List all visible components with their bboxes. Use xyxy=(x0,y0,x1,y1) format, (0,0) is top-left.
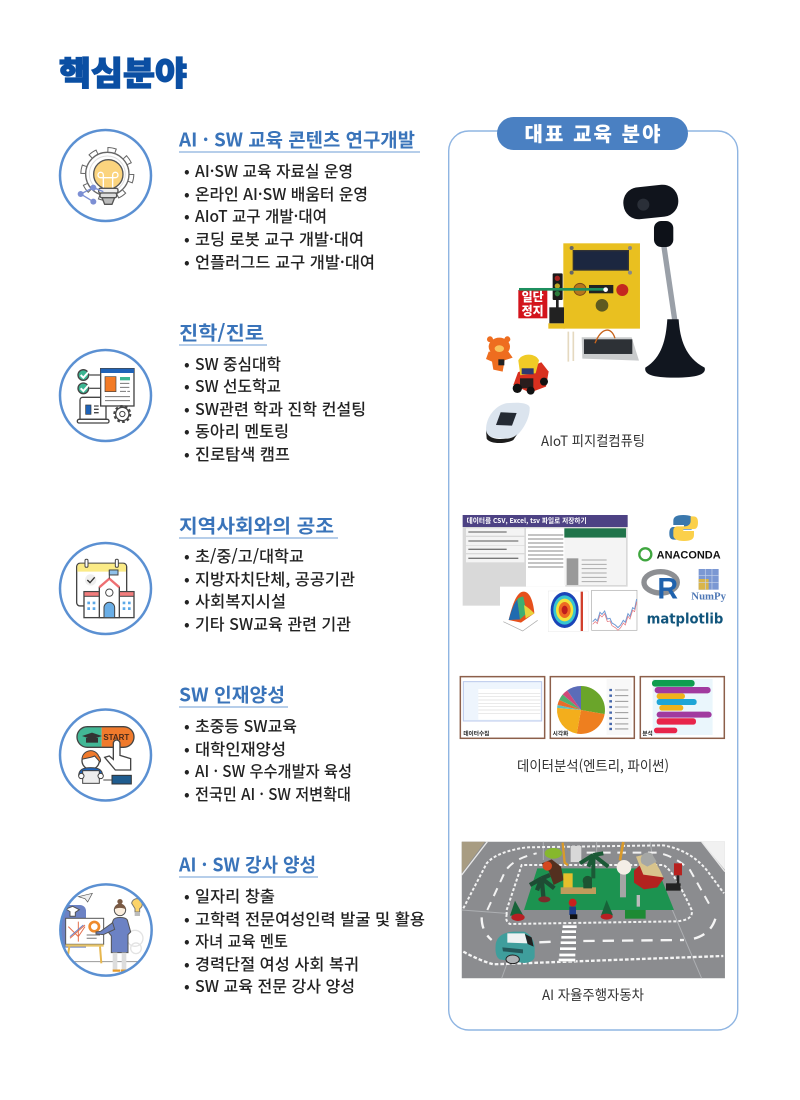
model trees and buildings xyxy=(510,842,682,921)
logo: R xyxy=(644,572,678,605)
logo: Python xyxy=(669,515,698,541)
bullet list: • xyxy=(184,906,190,930)
bullet list: • xyxy=(184,736,190,760)
title: 핵심분야 xyxy=(59,47,187,95)
bullet list: AI · SW 우수개발자 육성 xyxy=(195,758,352,782)
bullet list: SW 선도학교 xyxy=(195,373,281,397)
section: SW talent development xyxy=(60,680,352,805)
section: community collaboration xyxy=(60,512,355,635)
bullet list: SW 중심대학 xyxy=(195,351,281,375)
heading: AI · SW 교육 콘텐츠 연구개발 xyxy=(178,126,415,152)
bullet list: 지방자치단체, 공공기관 xyxy=(195,566,355,590)
bullet list: AIoT 교구 개발·대여 xyxy=(195,203,327,227)
caption: self-driving car: AI 자율주행자동차 xyxy=(542,985,644,1005)
bullet list: • xyxy=(184,883,190,907)
bullet list: SW관련 학과 진학 컨설팅 xyxy=(195,396,366,420)
bullet list: • xyxy=(184,781,190,805)
data collection thumbnail xyxy=(460,677,545,738)
bullet list xyxy=(184,883,425,997)
bullet list: SW 교육 전문 강사 양성 xyxy=(195,973,355,997)
bullet list: • xyxy=(184,951,190,975)
bullet list: • xyxy=(184,418,190,442)
bullet list: 사회복지시설 xyxy=(195,588,286,612)
bullet list: 일자리 창출 xyxy=(195,883,275,907)
bullet list: 온라인 AI·SW 배움터 운영 xyxy=(195,181,368,205)
icon: instructor presenting xyxy=(60,884,152,976)
visualization thumbnail xyxy=(550,677,634,738)
heading: SW 인재양성 xyxy=(179,680,285,708)
heading: AI · SW 강사 양성 xyxy=(178,850,316,878)
panel heading pill xyxy=(497,117,688,150)
bullet list: 기타 SW교육 관련 기관 xyxy=(195,611,351,635)
icon: start button with child and hand: START xyxy=(103,733,129,742)
section: AI·SW instructor training xyxy=(60,850,425,997)
bullet list xyxy=(184,158,375,273)
yellow controller box: 일단 xyxy=(522,288,544,305)
bullet list: • xyxy=(184,396,190,420)
section: AI·SW content R&D xyxy=(60,126,420,273)
bullet list: • xyxy=(184,928,190,952)
bullet list: • xyxy=(184,566,190,590)
slide screenshot xyxy=(463,515,628,606)
heading: 진학/진로 xyxy=(179,318,264,346)
slide screenshot: 데이터를 CSV, Excel, tsv 파일로 저장하기 xyxy=(467,515,587,525)
image: self-driving car track xyxy=(462,842,725,978)
bullet list: • xyxy=(184,181,190,205)
heading: 지역사회와의 공조 xyxy=(179,512,334,538)
bullet list: 전국민 AI · SW 저변확대 xyxy=(195,781,351,805)
data collection thumbnail: 데이터수집 xyxy=(463,729,489,738)
bullet list: • xyxy=(184,713,190,737)
image: AIoT physical computing kit xyxy=(486,183,705,443)
bullet list: • xyxy=(184,373,190,397)
analysis thumbnail xyxy=(640,677,724,738)
bullet list: 고학력 전문여성인력 발굴 및 활용 xyxy=(195,906,425,930)
image: Python data work xyxy=(460,515,727,738)
analysis thumbnail: 분석 xyxy=(642,729,653,738)
bullet list xyxy=(184,713,352,805)
bullet list: • xyxy=(184,249,190,273)
charts strip xyxy=(500,587,638,632)
bullet list: • xyxy=(184,203,190,227)
bullet list: • xyxy=(184,611,190,635)
white toy car xyxy=(486,403,530,443)
panel: representative education fields xyxy=(449,117,738,1030)
bullet list: 대학인재양성 xyxy=(195,736,286,760)
bullet list: • xyxy=(184,758,190,782)
bullet list: • xyxy=(184,588,190,612)
logo: R: R xyxy=(657,572,678,605)
visualization thumbnail: 시각화 xyxy=(553,729,569,738)
icon: checklist, window, laptop, gear xyxy=(60,350,151,441)
bullet list: 언플러그드 교구 개발·대여 xyxy=(195,249,375,273)
bullet list: • xyxy=(184,973,190,997)
yellow controller box xyxy=(518,243,640,329)
teal model car xyxy=(495,932,535,964)
toy truck xyxy=(513,355,549,395)
webcam on stand xyxy=(622,183,705,378)
icon: start button with child and hand xyxy=(60,710,151,800)
logo: matplotlib: matplotlib xyxy=(647,611,723,627)
bullet list: AI·SW 교육 자료실 운영 xyxy=(195,158,353,182)
bullet list: 경력단절 여성 사회 복귀 xyxy=(195,951,359,975)
bullet list: 초/중/고/대학교 xyxy=(195,543,304,567)
bullet list: 동아리 멘토링 xyxy=(195,418,289,442)
bullet list xyxy=(184,351,366,465)
bullet list xyxy=(184,543,355,635)
icon: calendar and school xyxy=(60,543,151,634)
logo: Anaconda: ANACONDA xyxy=(657,549,721,561)
panel heading pill: 대표 교육 분야 xyxy=(524,118,660,147)
bullet list: 초중등 SW교육 xyxy=(195,713,297,737)
caption: AIoT: AIoT 피지컬컴퓨팅 xyxy=(541,431,645,451)
toy bear xyxy=(486,336,513,372)
road mat xyxy=(462,842,725,978)
bullet list: 자녀 교육 멘토 xyxy=(195,928,288,952)
logo: NumPy: NumPy xyxy=(691,591,727,602)
microcontroller board xyxy=(568,330,639,362)
bullet list: • xyxy=(184,226,190,250)
bullet list: 진로탐색 캠프 xyxy=(195,441,290,465)
bullet list: • xyxy=(184,441,190,465)
bullet list: • xyxy=(184,351,190,375)
logo: NumPy xyxy=(691,569,727,602)
bullet list: • xyxy=(184,543,190,567)
bullet list: • xyxy=(184,158,190,182)
icon: lightbulb and gear xyxy=(60,130,151,221)
yellow controller box: 정지 xyxy=(522,302,544,319)
bullet list: 코딩 로봇 교구 개발·대여 xyxy=(195,226,364,250)
caption: data analysis: 데이터분석(엔트리, 파이썬) xyxy=(517,756,669,776)
section: admissions and careers xyxy=(60,318,366,465)
